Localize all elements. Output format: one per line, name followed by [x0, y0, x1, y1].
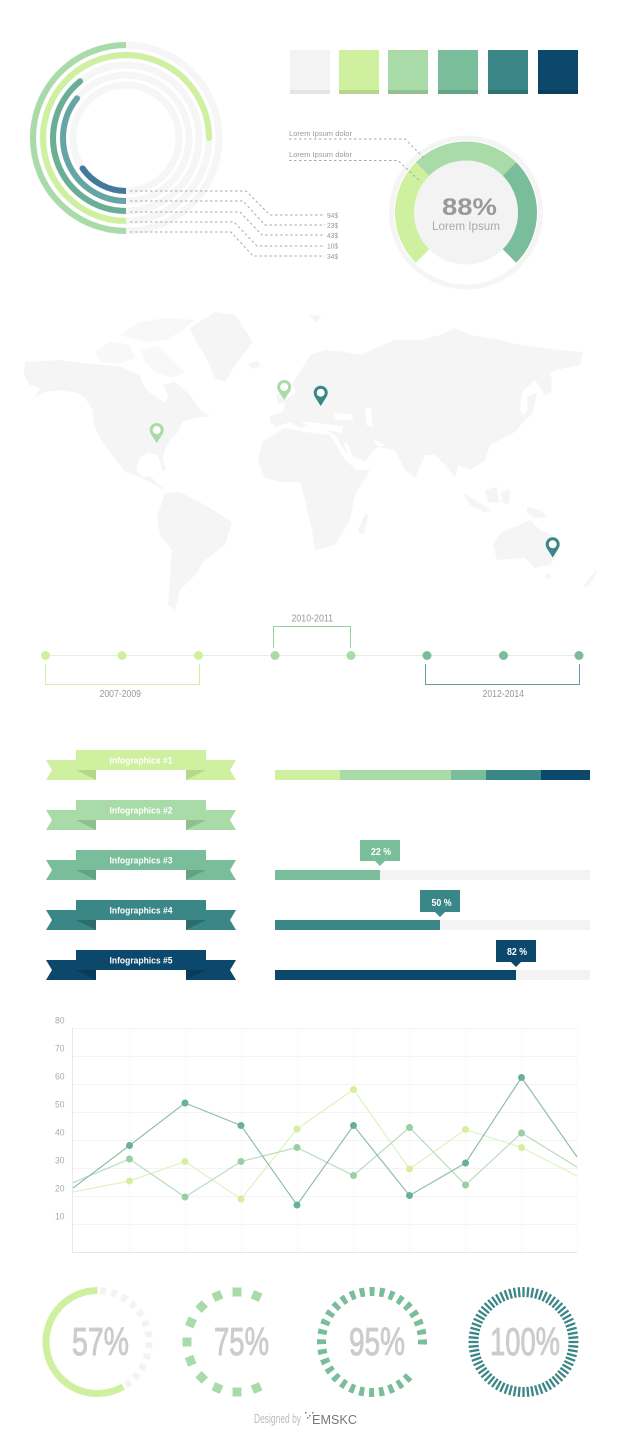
ribbon 2	[46, 800, 236, 830]
ribbon 1: Infographics #1	[110, 756, 173, 766]
ribbon 2: Infographics #2	[110, 806, 172, 816]
donut value: 88%	[442, 194, 497, 221]
ring values: 94$	[327, 211, 339, 220]
panel: world map	[24, 312, 597, 610]
logo mark dots	[305, 1412, 314, 1418]
series: dark teal	[73, 1074, 577, 1208]
ribbon 1	[46, 750, 236, 780]
donut segments	[404, 151, 528, 256]
footer credit	[254, 1411, 357, 1427]
donut labels: Lorem Ipsum dolor	[289, 129, 353, 138]
panel: gauge 75%: 75%	[214, 1321, 269, 1364]
series: mid green	[73, 1124, 577, 1200]
progress bar 22%: 22 %	[371, 847, 391, 858]
icon: map pin Europe west	[278, 382, 290, 400]
ring values: 34$	[327, 252, 339, 261]
ribbon 3: Infographics #3	[110, 856, 172, 866]
chart axis labels: 40	[55, 1128, 64, 1138]
chart axis labels: 20	[55, 1184, 64, 1194]
colour swatches	[290, 50, 578, 94]
ring values: 10$	[327, 242, 339, 250]
donut centre disc	[414, 160, 518, 264]
donut labels: Lorem Ipsum dolor	[289, 150, 353, 159]
stacked bar	[275, 770, 590, 780]
panel: gauge 95%	[321, 1292, 422, 1393]
donut leader lines	[289, 139, 424, 182]
timeline labels: 2012-2014	[482, 689, 524, 700]
panel: gauge 100%	[468, 1287, 578, 1397]
donut caption: Lorem Ipsum	[432, 221, 500, 233]
chart grid	[72, 1028, 578, 1252]
timeline labels: 2007-2009	[100, 689, 141, 700]
ring values: 43$	[327, 231, 339, 240]
timeline axis	[45, 654, 579, 656]
panel: gauge 57%: 57%	[72, 1321, 129, 1364]
chart axis labels: 80	[55, 1016, 64, 1026]
panel: timeline	[41, 614, 584, 700]
timeline brackets	[46, 626, 580, 684]
chart axis labels	[55, 1016, 64, 1222]
icon: map pin Australia	[546, 539, 559, 558]
ribbon 4	[46, 900, 236, 930]
progress bar 22%	[275, 840, 590, 880]
icon: map pin USA	[150, 424, 163, 443]
footer credit: EMSKC	[312, 1412, 357, 1427]
ribbon 5	[46, 950, 236, 980]
progress bar 50%	[275, 890, 590, 930]
icon: map pin Europe east	[314, 387, 327, 406]
progress bar 50%: 50 %	[432, 898, 452, 909]
chart axis labels: 30	[55, 1156, 64, 1166]
ring arcs	[33, 45, 212, 231]
panel: gauge 75%	[182, 1288, 269, 1396]
panel: gauge 100%: 100%	[490, 1321, 560, 1364]
dotted leader lines	[130, 191, 325, 256]
chart axis labels: 50	[55, 1100, 64, 1110]
chart axis labels: 10	[55, 1212, 64, 1222]
ribbon 4: Infographics #4	[110, 906, 173, 916]
ribbon 5: Infographics #5	[110, 956, 173, 966]
progress bar 82%	[275, 940, 590, 980]
donut labels	[289, 129, 353, 159]
panel: gauge 95%: 95%	[349, 1321, 405, 1364]
footer credit: Designed by	[254, 1411, 301, 1426]
panel: donut gauge	[289, 129, 540, 287]
ring values	[327, 211, 339, 261]
series: light green	[73, 1086, 577, 1202]
progress bar 82%: 82 %	[507, 947, 527, 958]
timeline labels	[100, 614, 524, 700]
ring tracks	[33, 45, 219, 231]
timeline dots	[41, 651, 584, 660]
panel: concentric ring chart	[33, 45, 339, 261]
map: land masses	[24, 312, 597, 610]
panel: line chart	[55, 1016, 578, 1252]
panel: ribbons	[46, 750, 236, 980]
chart axis labels: 70	[55, 1044, 64, 1054]
ring values: 23$	[327, 221, 339, 230]
donut outer ring	[392, 138, 540, 287]
chart axis labels: 60	[55, 1072, 64, 1082]
ribbon 3	[46, 850, 236, 880]
panel: gauge 57%	[46, 1290, 149, 1394]
timeline labels: 2010-2011	[292, 614, 333, 624]
map: inland seas	[300, 407, 386, 466]
